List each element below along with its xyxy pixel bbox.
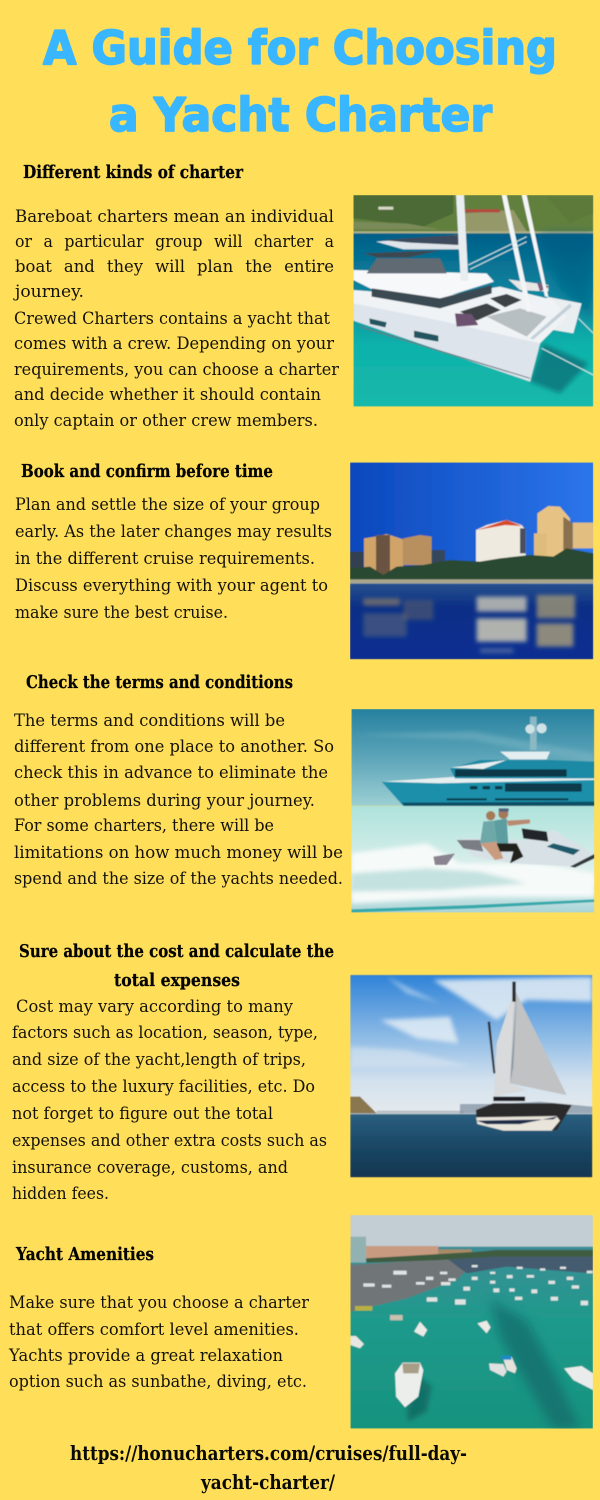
heading: book and confirm before time: Book and confirm before time [21,461,273,482]
text block: amenities: Yachts provide a great relaxation [8,1346,283,1366]
text block: plan group size: early. As the later changes may results [15,522,332,542]
photo: white catamaran on turquoise water [353,195,593,407]
photo: waterfront skyline under blue sky [350,462,593,659]
source link [70,1441,467,1494]
text block: amenities: option such as sunbathe, diving, etc. [9,1372,307,1392]
text block: amenities [8,1293,310,1392]
text block: cost factors: access to the luxury facilities, etc. Do [12,1077,315,1097]
text block: terms differ by location: different from one place to another. So [14,737,334,757]
title: A Guide for Choosing [43,21,557,75]
text block: cost factors: Cost may vary according to many [16,997,293,1017]
text block: terms differ by location: other problems during your journey. [14,791,315,811]
photo: aerial view of anchored boats [350,1215,593,1429]
panel: book and confirm before time [15,461,593,659]
heading: yacht amenities: Yacht Amenities [15,1244,154,1265]
text block: amenities: that offers comfort level amenities. [9,1320,299,1340]
title: a Yacht Charter [109,88,492,142]
text block: bareboat and crewed charters: Bareboat charters mean an individual [15,207,334,227]
heading: check the terms and conditions: Check the terms and conditions [26,672,293,693]
heading: sure about the cost and calculate the total expenses: Sure about the cost and calculate the [19,941,334,962]
text block: terms differ by location: For some charters, there will be [14,816,274,836]
text block: cost factors [12,997,327,1204]
text block: bareboat and crewed charters: comes with a crew. Depending on your [14,334,335,354]
text block: terms differ by location: check this in advance to eliminate the [14,763,328,783]
heading: sure about the cost and calculate the total expenses: total expenses [114,970,240,991]
photo: superyacht and jet ski [351,709,594,913]
text block: terms differ by location: limitations on how much money will be [14,843,343,863]
text block: plan group size [15,495,332,623]
source link: https://honucharters.com/cruises/full-day- [70,1441,467,1465]
text block: bareboat and crewed charters: boat and they will plan the entire [15,257,334,277]
heading: sure about the cost and calculate the total expenses [19,941,334,991]
text block: bareboat and crewed charters [13,207,340,431]
text block: cost factors: not forget to figure out the total [12,1104,273,1124]
text block: bareboat and crewed charters: and decide whether it should contain [14,385,321,405]
text block: terms differ by location: The terms and conditions will be [14,711,285,731]
text block: bareboat and crewed charters: or a particular group will charter a [15,232,334,252]
text block: bareboat and crewed charters: requirements, you can choose a charter [14,360,340,380]
text block: bareboat and crewed charters: Crewed Charters contains a yacht that [14,309,330,329]
source link: yacht-charter/ [200,1470,336,1494]
photo: sailboat on the bay [350,975,592,1177]
panel: different kinds of charter [13,162,593,431]
text block: bareboat and crewed charters: only captain or other crew members. [14,411,318,431]
text block: plan group size: make sure the best cruise. [15,603,228,623]
text block: cost factors: hidden fees. [12,1184,109,1204]
text block: terms differ by location: spend and the size of the yachts needed. [14,869,343,889]
text block: plan group size: Plan and settle the size of your group [15,495,320,515]
text block: bareboat and crewed charters: journey. [13,282,84,302]
text block: cost factors: and size of the yacht,length of trips, [12,1050,306,1070]
heading: different kinds of charter: Different kinds of charter [23,162,243,183]
text block: amenities: Make sure that you choose a charter [9,1293,310,1313]
title [43,21,557,142]
text block: cost factors: factors such as location, season, type, [12,1023,318,1043]
text block: terms differ by location [14,711,343,889]
panel: sure about the cost [12,941,592,1204]
panel: check the terms and conditions [14,672,594,913]
panel: yacht amenities [8,1215,593,1429]
text block: cost factors: expenses and other extra costs such as [12,1131,327,1151]
text block: plan group size: in the different cruise requirements. [15,549,315,569]
text block: plan group size: Discuss everything with your agent to [15,576,328,596]
text block: cost factors: insurance coverage, customs, and [12,1158,288,1178]
